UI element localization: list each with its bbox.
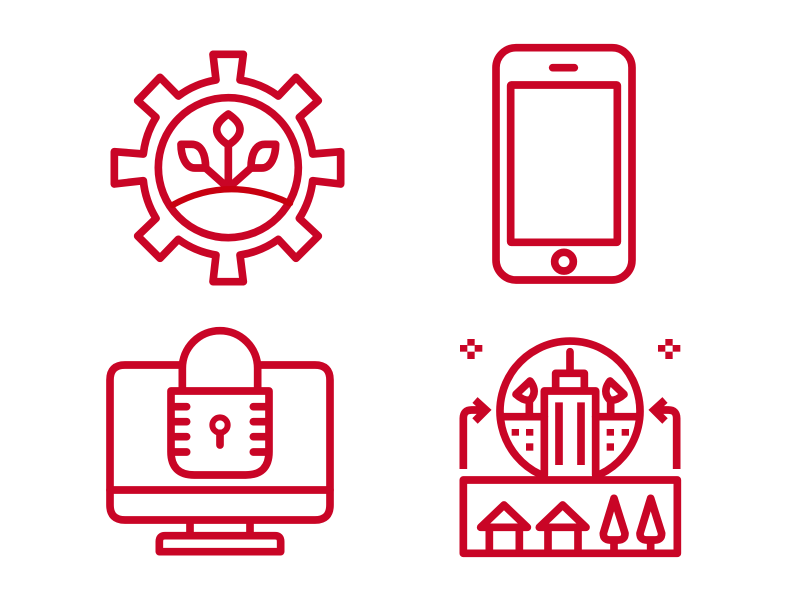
- globe: [500, 341, 640, 474]
- sparkle left: [460, 339, 482, 359]
- padlock shackle: [182, 331, 258, 390]
- icon: city globe above neighbourhood: [460, 339, 680, 553]
- plant: [181, 114, 276, 187]
- ground box: [463, 480, 677, 553]
- monitor chin line: [110, 478, 330, 501]
- arrow left: [463, 400, 486, 469]
- building windows: [512, 429, 629, 451]
- house one: [481, 505, 527, 552]
- ground curve: [173, 189, 290, 205]
- skyscraper: [544, 352, 596, 475]
- icon: smartphone: [496, 48, 632, 280]
- monitor base: [159, 536, 281, 552]
- keyhole: [212, 417, 228, 445]
- horizon: [501, 405, 639, 428]
- arrow right: [654, 400, 677, 469]
- tree two: [640, 498, 662, 552]
- phone screen: [511, 85, 617, 242]
- skyscraper windows: [559, 402, 581, 465]
- padlock ridges: [173, 407, 267, 452]
- tree one: [603, 498, 625, 552]
- speaker: [553, 56, 574, 79]
- monitor frame: [110, 365, 330, 520]
- inner circle: [158, 98, 298, 238]
- home button: [555, 252, 573, 271]
- right tree in globe: [606, 381, 624, 417]
- phone body: [496, 48, 632, 280]
- icon: gear with sprouting plant: [114, 54, 341, 282]
- left tree in globe: [516, 381, 534, 417]
- monitor neck: [190, 520, 250, 533]
- gear outline: [114, 54, 341, 282]
- sparkle right: [658, 339, 680, 359]
- padlock body: [171, 391, 269, 475]
- icon: monitor with padlock: [110, 331, 330, 552]
- house two: [539, 505, 586, 552]
